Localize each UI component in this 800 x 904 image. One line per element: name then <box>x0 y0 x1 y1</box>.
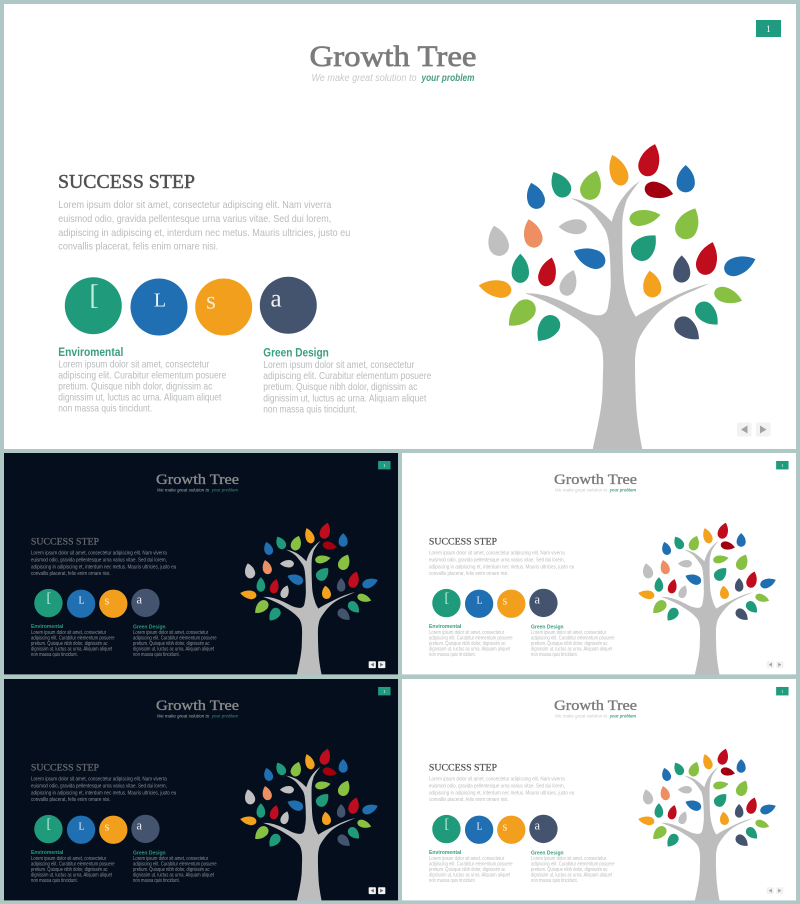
column: green design: Lorem ipsum dolor sit amet, consectetur <box>531 856 606 862</box>
column: green design: Green Design <box>531 850 564 856</box>
tagline accent: your problem <box>421 73 475 84</box>
column: enviromental: non massa quis tincidunt. <box>58 403 152 415</box>
column: enviromental: pretium. Quisque nibh dolor, dignissim ac <box>429 867 506 873</box>
four coloured icon circles: a <box>270 286 282 312</box>
slide: small white slide top right <box>402 453 796 675</box>
intro paragraph: Lorem ipsum dolor sit amet, consectetur adipiscing elit. Nam viverra <box>429 550 565 556</box>
column: green design: adipiscing elit. Curabitur elementum posuere <box>531 862 615 868</box>
page number badge: 1 <box>781 463 783 468</box>
column: enviromental: Enviromental <box>429 850 462 856</box>
title: Growth Tree <box>156 472 239 488</box>
intro paragraph: adipiscing in adipiscing et, interdum nec metus. Mauris ultricies, justo eu <box>31 564 176 570</box>
intro paragraph: euismod odio, gravida pellentesque urna varius vitae. Sed dui lorem, <box>429 783 565 789</box>
previous and next navigation buttons <box>767 661 783 668</box>
tagline: We make great solution to <box>312 73 417 84</box>
four coloured icon circles: a <box>137 592 143 606</box>
growth tree illustration <box>477 141 759 449</box>
previous and next navigation buttons <box>767 887 783 894</box>
column: green design: Lorem ipsum dolor sit amet, consectetur <box>263 359 415 371</box>
heading: success step: SUCCESS STEP <box>429 537 497 548</box>
page number badge <box>378 687 391 695</box>
column: green design: adipiscing elit. Curabitur elementum posuere <box>133 862 217 868</box>
four coloured icon circles: s <box>503 819 508 833</box>
column: green design: Lorem ipsum dolor sit amet, consectetur <box>133 630 208 636</box>
column: green design: pretium. Quisque nibh dolor, dignissim ac <box>531 867 608 873</box>
column: green design: adipiscing elit. Curabitur elementum posuere <box>531 636 615 642</box>
column: enviromental <box>429 850 513 884</box>
intro paragraph: convallis placerat, felis enim ornare nisi. <box>58 240 218 252</box>
intro paragraph: euismod odio, gravida pellentesque urna varius vitae. Sed dui lorem, <box>31 557 167 563</box>
four coloured icon circles: a <box>137 818 143 832</box>
column: enviromental: pretium. Quisque nibh dolor, dignissim ac <box>31 867 108 873</box>
previous and next navigation buttons <box>737 422 770 436</box>
intro paragraph: adipiscing in adipiscing et, interdum nec metus. Mauris ultricies, justo eu <box>429 790 574 796</box>
column: enviromental: dignissim ut, luctus ac urna. Aliquam aliquet <box>31 872 113 878</box>
four coloured icon circles: [ <box>89 280 99 311</box>
growth tree illustration <box>637 747 777 901</box>
column: green design: Green Design <box>263 348 329 360</box>
column: enviromental: Lorem ipsum dolor sit amet, consectetur <box>31 856 106 862</box>
intro paragraph: adipiscing in adipiscing et, interdum nec metus. Mauris ultricies, justo eu <box>429 564 574 570</box>
column: enviromental: non massa quis tincidunt. <box>429 878 476 884</box>
intro paragraph: adipiscing in adipiscing et, interdum nec metus. Mauris ultricies, justo eu <box>31 790 176 796</box>
intro paragraph: euismod odio, gravida pellentesque urna varius vitae. Sed dui lorem, <box>429 557 565 563</box>
intro paragraph <box>429 776 574 803</box>
four coloured icon circles <box>432 589 558 618</box>
intro paragraph: convallis placerat, felis enim ornare nisi. <box>31 797 111 803</box>
column: enviromental <box>58 347 226 415</box>
column: enviromental: Enviromental <box>58 347 123 359</box>
column: enviromental <box>31 850 115 884</box>
heading: success step: SUCCESS STEP <box>31 763 99 774</box>
title: Growth Tree <box>156 698 239 714</box>
tagline accent: your problem <box>211 487 239 493</box>
column: green design: pretium. Quisque nibh dolor, dignissim ac <box>531 641 608 647</box>
heading: success step: SUCCESS STEP <box>31 537 99 548</box>
tagline: We make great solution to <box>157 487 209 493</box>
column: enviromental: non massa quis tincidunt. <box>429 652 476 658</box>
column: enviromental: dignissim ut, luctus ac urna. Aliquam aliquet <box>31 646 113 652</box>
column: enviromental: non massa quis tincidunt. <box>31 652 78 658</box>
four coloured icon circles: L <box>154 290 166 312</box>
four coloured icon circles <box>34 589 160 618</box>
column: green design <box>133 850 217 884</box>
intro paragraph <box>429 550 574 577</box>
four coloured icon circles <box>65 277 317 336</box>
four coloured icon circles <box>432 815 558 844</box>
tagline accent: your problem <box>609 487 637 493</box>
page number badge: 1 <box>766 24 771 34</box>
four coloured icon circles: a <box>535 592 541 606</box>
four coloured icon circles: s <box>105 819 110 833</box>
tagline: We make great solution to <box>555 713 607 719</box>
column: enviromental: adipiscing elit. Curabitur elementum posuere <box>31 861 115 867</box>
column: green design <box>531 850 615 884</box>
column: green design: adipiscing elit. Curabitur elementum posuere <box>133 636 217 642</box>
column: green design <box>133 624 217 658</box>
tagline: We make great solution to <box>555 487 607 493</box>
column: green design: adipiscing elit. Curabitur elementum posuere <box>263 370 431 382</box>
title: Growth Tree <box>554 698 637 714</box>
column: enviromental: Lorem ipsum dolor sit amet, consectetur <box>31 630 106 636</box>
column: green design: Lorem ipsum dolor sit amet, consectetur <box>133 856 208 862</box>
four coloured icon circles: s <box>503 593 508 607</box>
column: green design <box>531 624 615 658</box>
page number badge: 1 <box>383 689 385 694</box>
four coloured icon circles: L <box>79 596 85 607</box>
column: green design <box>263 348 431 415</box>
four coloured icon circles: L <box>79 822 85 833</box>
column: enviromental: Enviromental <box>31 624 64 630</box>
tagline accent: your problem <box>609 713 637 719</box>
column: green design: non massa quis tincidunt. <box>263 403 357 415</box>
column: green design: pretium. Quisque nibh dolor, dignissim ac <box>263 381 417 393</box>
column: green design: non massa quis tincidunt. <box>133 878 180 884</box>
column: green design: dignissim ut, luctus ac urna. Aliquam aliquet <box>133 873 215 879</box>
intro paragraph: Lorem ipsum dolor sit amet, consectetur adipiscing elit. Nam viverra <box>429 776 565 782</box>
column: green design: dignissim ut, luctus ac urna. Aliquam aliquet <box>133 647 215 653</box>
previous and next navigation buttons <box>369 661 385 668</box>
column: enviromental: pretium. Quisque nibh dolor, dignissim ac <box>58 380 212 392</box>
title: Growth Tree <box>554 472 637 488</box>
column: enviromental: adipiscing elit. Curabitur elementum posuere <box>429 635 513 641</box>
column: enviromental: dignissim ut, luctus ac urna. Aliquam aliquet <box>429 872 511 878</box>
column: enviromental: non massa quis tincidunt. <box>31 878 78 884</box>
column: enviromental: Enviromental <box>31 850 64 856</box>
intro paragraph: convallis placerat, felis enim ornare nisi. <box>429 797 509 803</box>
intro paragraph <box>31 776 176 803</box>
page number badge <box>756 20 781 37</box>
four coloured icon circles: [ <box>444 591 449 606</box>
intro paragraph: euismod odio, gravida pellentesque urna varius vitae. Sed dui lorem, <box>31 783 167 789</box>
slide: small dark slide bottom left <box>4 679 398 901</box>
column: enviromental: pretium. Quisque nibh dolor, dignissim ac <box>31 641 108 647</box>
column: enviromental: pretium. Quisque nibh dolor, dignissim ac <box>429 641 506 647</box>
tagline accent: your problem <box>211 713 239 719</box>
previous and next navigation buttons <box>369 887 385 894</box>
four coloured icon circles: [ <box>46 817 51 832</box>
four coloured icon circles: L <box>477 822 483 833</box>
column: green design: dignissim ut, luctus ac urna. Aliquam aliquet <box>531 873 613 879</box>
heading: success step: SUCCESS STEP <box>429 763 497 774</box>
four coloured icon circles: [ <box>444 817 449 832</box>
column: green design: dignissim ut, luctus ac urna. Aliquam aliquet <box>263 392 426 404</box>
column: green design: Green Design <box>133 850 166 856</box>
column: enviromental: adipiscing elit. Curabitur elementum posuere <box>31 635 115 641</box>
page number badge <box>378 461 391 469</box>
column: green design: non massa quis tincidunt. <box>133 652 180 658</box>
column: enviromental <box>31 624 115 658</box>
intro paragraph <box>31 550 176 577</box>
column: green design: pretium. Quisque nibh dolor, dignissim ac <box>133 867 210 873</box>
four coloured icon circles: s <box>206 288 216 314</box>
intro paragraph: convallis placerat, felis enim ornare nisi. <box>429 571 509 577</box>
heading: success step: SUCCESS STEP <box>58 172 195 193</box>
column: enviromental: dignissim ut, luctus ac urna. Aliquam aliquet <box>429 646 511 652</box>
column: enviromental: dignissim ut, luctus ac urna. Aliquam aliquet <box>58 392 221 404</box>
column: enviromental <box>429 624 513 658</box>
title: Growth Tree <box>310 40 476 73</box>
intro paragraph: Lorem ipsum dolor sit amet, consectetur adipiscing elit. Nam viverra <box>31 550 167 556</box>
intro paragraph: convallis placerat, felis enim ornare nisi. <box>31 571 111 577</box>
intro paragraph: euismod odio, gravida pellentesque urna varius vitae. Sed dui lorem, <box>58 213 331 225</box>
intro paragraph: adipiscing in adipiscing et, interdum nec metus. Mauris ultricies, justo eu <box>58 227 350 239</box>
page number badge: 1 <box>383 463 385 468</box>
column: green design: non massa quis tincidunt. <box>531 878 578 884</box>
column: enviromental: adipiscing elit. Curabitur elementum posuere <box>58 370 226 382</box>
column: green design: Lorem ipsum dolor sit amet, consectetur <box>531 630 606 636</box>
growth tree illustration <box>239 521 379 675</box>
four coloured icon circles: L <box>477 596 483 607</box>
column: enviromental: Enviromental <box>429 624 462 630</box>
four coloured icon circles: a <box>535 818 541 832</box>
column: enviromental: Lorem ipsum dolor sit amet, consectetur <box>429 856 504 862</box>
page number badge: 1 <box>781 689 783 694</box>
intro paragraph: Lorem ipsum dolor sit amet, consectetur adipiscing elit. Nam viverra <box>58 199 331 211</box>
four coloured icon circles <box>34 815 160 844</box>
column: green design: non massa quis tincidunt. <box>531 652 578 658</box>
growth tree illustration <box>239 747 379 901</box>
intro paragraph: Lorem ipsum dolor sit amet, consectetur adipiscing elit. Nam viverra <box>31 776 167 782</box>
four coloured icon circles: s <box>105 593 110 607</box>
slide: small white slide bottom right <box>402 679 796 901</box>
slide: large white main slide <box>4 4 796 449</box>
intro paragraph <box>58 199 350 252</box>
four coloured icon circles: [ <box>46 591 51 606</box>
growth tree illustration <box>637 521 777 675</box>
page number badge <box>776 687 789 695</box>
column: enviromental: adipiscing elit. Curabitur elementum posuere <box>429 861 513 867</box>
column: enviromental: Lorem ipsum dolor sit amet, consectetur <box>58 358 210 370</box>
column: green design: Green Design <box>531 624 564 630</box>
slide: small dark slide top left <box>4 453 398 675</box>
column: green design: Green Design <box>133 624 166 630</box>
page number badge <box>776 461 789 469</box>
column: green design: dignissim ut, luctus ac urna. Aliquam aliquet <box>531 647 613 653</box>
column: green design: pretium. Quisque nibh dolor, dignissim ac <box>133 641 210 647</box>
tagline: We make great solution to <box>157 713 209 719</box>
column: enviromental: Lorem ipsum dolor sit amet, consectetur <box>429 630 504 636</box>
